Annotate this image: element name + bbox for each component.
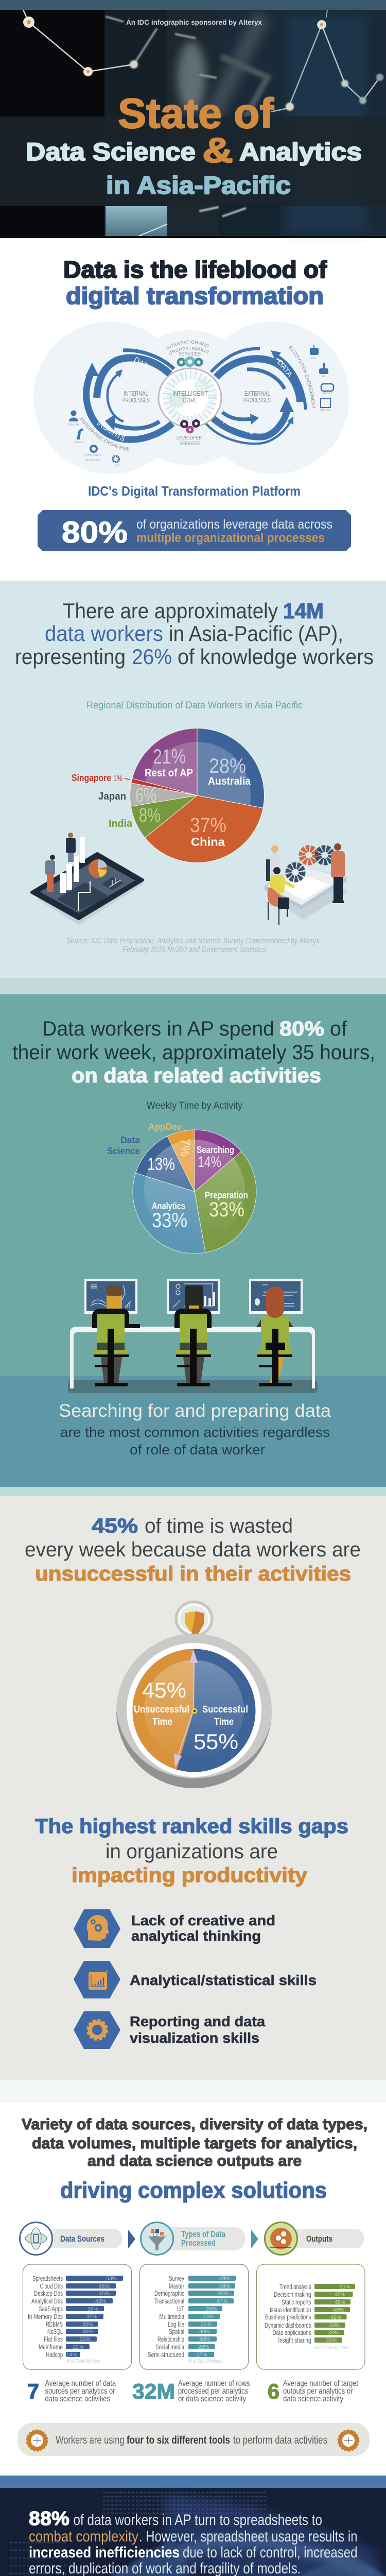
card: data sources bars: 36% <box>87 2306 98 2312</box>
pie chart: weekly time by activity: 33% <box>209 1198 244 1221</box>
pie chart: regional distribution <box>72 728 265 863</box>
heading: driving complex solutions <box>60 2178 327 2203</box>
card: outputs bars: 39% <box>329 2323 340 2329</box>
pie chart: weekly time by activity: Data <box>120 1135 141 1145</box>
card: types of data bars: Log file <box>168 2320 184 2328</box>
panel: data workers <box>15 599 374 954</box>
chart: stopwatch time split: 55% <box>194 1730 238 1754</box>
text: searching and preparing: of role of data worker <box>130 1442 265 1458</box>
callout: 80% of organizations: multiple organizational processes <box>136 531 325 545</box>
source note <box>66 937 321 954</box>
header: outputs: Outputs <box>306 2234 332 2244</box>
card: outputs bars: % of Data Workers <box>314 2345 348 2351</box>
arrow <box>251 2230 258 2248</box>
icons: ecosystem devices: AR/VR <box>322 392 332 395</box>
pie chart: weekly time by activity: Preparation <box>205 1190 248 1200</box>
desk <box>70 1327 315 1388</box>
process labels: INTERNAL <box>124 390 148 397</box>
card: outputs bars: 48% <box>335 2292 345 2298</box>
right loop arrows <box>206 349 306 444</box>
card: types of data bars: 33% <box>203 2314 214 2320</box>
intelligent core: INTELLIGENT <box>172 390 208 397</box>
card: data sources bars: Spreadsheets <box>32 2275 63 2282</box>
icons: ecosystem devices: IoT <box>322 375 327 378</box>
panel: call to action <box>0 2488 386 2576</box>
chart title: Regional Distribution of Data Workers in Asia Pacific <box>86 700 303 711</box>
card: data sources bars: 30% <box>82 2329 93 2335</box>
card: data sources bars: Desktop Dbs <box>34 2290 63 2297</box>
stat: 32M rows: Average number of rows <box>178 2379 250 2388</box>
heading: 14M <box>283 599 324 623</box>
icons: enterprise: Processes <box>85 459 101 462</box>
pie chart: regional distribution: Singapore <box>72 773 111 783</box>
heading: of <box>330 1018 347 1040</box>
text: spreadsheets finding: 88% <box>29 2508 69 2530</box>
pie chart: weekly time by activity: Science <box>107 1146 140 1156</box>
icons: enterprise: API <box>114 464 120 467</box>
heading: data workers <box>45 621 163 646</box>
pie chart: weekly time by activity: Searching <box>197 1145 234 1155</box>
card: data sources bars: RDBMS <box>46 2320 63 2328</box>
hero photo background <box>0 0 386 238</box>
engagement arc labels: DEVELOPER <box>177 435 202 441</box>
text: spreadsheets finding: combat complexity <box>29 2528 138 2545</box>
band labels: DATA <box>132 355 154 372</box>
pie chart: regional distribution: 1% <box>113 774 122 783</box>
stat: 32M rows: processed per analytics <box>178 2387 248 2396</box>
callout: 80% of organizations: of organizations leverage data across <box>136 517 332 532</box>
card: outputs bars <box>256 2264 365 2369</box>
source note: Source: IDC Data Preparation, Analytics and Science Survey Commissioned by Alteryx, <box>66 937 321 945</box>
heading <box>12 1018 375 1087</box>
card: data sources bars: 29% <box>80 2336 91 2343</box>
card: data sources bars: In-Memory Dbs <box>28 2313 63 2320</box>
heading: 80% <box>279 1018 324 1040</box>
heading <box>15 599 374 669</box>
card: outputs bars: Static reports <box>282 2298 311 2306</box>
callout: tools: four to six different tools <box>127 2434 230 2446</box>
card: types of data bars: Survey <box>169 2275 184 2282</box>
person right <box>331 843 345 903</box>
card: types of data bars: 30% <box>199 2336 210 2343</box>
stat: 32M rows: 32M <box>132 2379 175 2403</box>
card: types of data bars: Multimedia <box>160 2313 184 2320</box>
engagement arc labels: INTEGRATION AND <box>166 340 209 350</box>
skill 3: visualization skills <box>130 2030 259 2046</box>
heading <box>25 1515 361 1585</box>
engagement arc labels: SERVICES <box>180 441 200 447</box>
skills heading: impacting productivity <box>72 1864 308 1887</box>
stat: 7 data sources: 7 <box>27 2379 39 2403</box>
stat: 7 data sources: data science activities <box>45 2395 110 2403</box>
pie chart: regional distribution: 28% <box>209 755 246 777</box>
icon: bar chart <box>74 1961 120 1998</box>
card: outputs bars: Issue identification <box>270 2306 311 2314</box>
heading: on data related activities <box>72 1064 321 1087</box>
heading: There are approximately <box>63 599 278 623</box>
stat: 7 data sources: sources per analytics or <box>45 2387 115 2396</box>
illustration: people on tablet <box>32 833 144 925</box>
card: outputs bars: 38% <box>328 2330 339 2336</box>
card: data sources bars <box>23 2264 132 2369</box>
heading <box>63 256 327 309</box>
header: data sources: Data Sources <box>60 2234 104 2244</box>
intelligent core: CORE <box>183 397 198 404</box>
card: outputs bars: Decision making <box>274 2291 311 2298</box>
skill 3: Reporting and data <box>130 2013 265 2029</box>
illustration: data workers at desks <box>68 1279 318 1393</box>
chart: stopwatch time split: 45% <box>142 1678 186 1702</box>
band labels <box>95 355 294 443</box>
dial hand arrow <box>174 1649 198 1768</box>
pie chart: regional distribution: 8% <box>139 805 161 826</box>
process labels: PROCESSES <box>243 397 271 404</box>
card: types of data bars: Transactional <box>154 2297 184 2305</box>
card: types of data bars: Semi-structured <box>148 2351 184 2359</box>
pie chart: weekly time by activity: 33% <box>152 1209 187 1232</box>
heading: 26% <box>132 645 172 669</box>
chart: stopwatch time split: Time <box>152 1717 172 1727</box>
card: types of data bars: 48% <box>218 2291 229 2297</box>
skill 2: Analytical/statistical skills <box>130 1972 317 1988</box>
worker 3 <box>256 1286 293 1386</box>
heading: representing <box>15 645 126 669</box>
card: outputs bars: 41% <box>330 2314 341 2320</box>
card: outputs bars: Data applications <box>273 2329 311 2336</box>
stopwatch crown <box>176 1602 212 1636</box>
panel: wasted time and skills <box>25 1515 361 2049</box>
pie chart: weekly time by activity: 14% <box>198 1154 221 1171</box>
icon: teal gears <box>178 358 202 366</box>
stat: 6 target outputs: outputs per analytics or <box>283 2387 353 2396</box>
card: types of data bars: 31% <box>201 2321 212 2328</box>
card: types of data bars: 28% <box>198 2344 209 2350</box>
icon: gear left <box>27 2430 47 2451</box>
icons: enterprise <box>68 410 120 467</box>
chart: stopwatch time split: Time <box>214 1717 234 1727</box>
card: outputs bars: 35% <box>326 2337 337 2344</box>
header: data sources <box>20 2223 122 2255</box>
text: searching and preparing <box>59 1401 331 1458</box>
skill 1 <box>74 1909 275 1948</box>
engagement arc labels <box>80 340 315 451</box>
background map photo <box>0 2488 386 2576</box>
diagram caption: IDC's Digital Transformation Platform <box>88 483 301 499</box>
pie chart: regional distribution: Japan <box>98 791 126 802</box>
heading: Variety of data sources, diversity of data types, <box>22 2116 367 2133</box>
stat: 7 data sources: Average number of data <box>45 2379 116 2388</box>
card: data sources bars: Analytical Dbs <box>31 2297 63 2305</box>
card: data sources bars: 22% <box>73 2344 83 2350</box>
worker 2 <box>174 1285 212 1386</box>
card: data sources bars: 53% <box>106 2276 117 2282</box>
card: data sources bars: Flat files <box>44 2335 63 2343</box>
pie chart: regional distribution: China <box>191 835 225 849</box>
title: Analytics <box>239 139 362 166</box>
person seated <box>268 867 294 925</box>
card: data sources bars: NoSQL <box>47 2328 63 2335</box>
header: types of data processed <box>141 2223 245 2255</box>
card: types of data bars: IoT <box>177 2305 184 2313</box>
callout: tools: to perform data activities <box>233 2434 327 2446</box>
card: outputs bars: Insight sharing <box>278 2336 311 2344</box>
icon: gear <box>74 2011 120 2049</box>
header: types of data processed: Types of Data <box>181 2229 225 2239</box>
icons: ecosystem devices: Bot <box>311 357 316 360</box>
skills heading: in organizations are <box>106 1840 278 1863</box>
pie chart: weekly time by activity: 13% <box>147 1155 175 1174</box>
card: types of data bars: Demographic <box>154 2290 184 2297</box>
chart lines in hero photo <box>23 10 383 112</box>
skill 1: analytical thinking <box>131 1928 261 1944</box>
worker 1 <box>92 1285 140 1386</box>
dial <box>133 1649 255 1772</box>
text: spreadsheets finding: of data workers in AP turn to spreadsheets to <box>73 2512 322 2529</box>
card: types of data bars: 49% <box>219 2283 231 2290</box>
band labels: DATA <box>276 358 294 379</box>
card: outputs bars: 45% <box>333 2307 344 2313</box>
pie chart: regional distribution: 21% <box>153 745 186 768</box>
intelligent core <box>159 368 221 427</box>
heading: of knowledge workers <box>178 645 374 669</box>
card: types of data bars: 30% <box>199 2329 210 2335</box>
engagement arc labels: SERVICES <box>179 351 201 357</box>
icon: developer gears <box>181 420 199 432</box>
card: types of data bars: Social media <box>155 2343 184 2351</box>
heading <box>22 2116 367 2203</box>
callout: tools <box>17 2423 370 2456</box>
card: data sources bars: 46% <box>99 2291 110 2297</box>
person standing <box>45 855 55 892</box>
card: outputs bars: Business predictions <box>265 2313 311 2321</box>
icon: head with gears <box>74 1909 120 1948</box>
process labels: EXTERNAL <box>244 390 270 397</box>
skill 3 <box>74 2011 265 2049</box>
skills heading: The highest ranked skills gaps <box>35 1815 348 1838</box>
card: types of data bars: 36% <box>206 2306 217 2312</box>
chart: stopwatch time split <box>116 1602 272 1788</box>
band labels: INSIGHTS <box>95 419 127 443</box>
text: spreadsheets finding: increased inefficiencies <box>29 2544 180 2561</box>
skills heading <box>35 1815 348 1887</box>
card: outputs bars: Trend analysis <box>279 2283 311 2291</box>
title: & <box>202 131 233 170</box>
engagement arc labels: ENTERPRISE ENGAGEMENTS <box>80 417 130 451</box>
source note: February 2019 N=200 and Government Statistics <box>122 945 266 954</box>
heading: 45% <box>92 1515 138 1537</box>
card: types of data bars <box>140 2264 248 2369</box>
stat: 32M rows <box>132 2379 250 2403</box>
callout: 80% of organizations: 80% <box>62 516 128 549</box>
card: outputs bars: Dynamic dashboards <box>265 2321 311 2329</box>
heading: of time is wasted <box>145 1515 293 1537</box>
icons: ecosystem devices <box>310 345 334 412</box>
heading: Data workers in AP spend <box>42 1018 274 1040</box>
heading: unsuccessful in their activities <box>35 1563 351 1585</box>
pie chart: weekly time by activity <box>107 1123 256 1254</box>
text: searching and preparing: are the most common activities regardless <box>60 1425 330 1440</box>
engagement arc labels: ORCHESTRATION <box>169 347 209 355</box>
skill 2 <box>74 1961 317 1998</box>
title <box>26 90 362 199</box>
card: types of data bars: 49% <box>219 2276 231 2282</box>
chart title: Weekly Time by Activity <box>147 1100 242 1111</box>
arrow <box>128 2230 135 2248</box>
icon: gear right <box>338 2430 359 2451</box>
card: data sources bars: Mainframe <box>39 2343 63 2351</box>
title: in Asia-Pacific <box>106 172 291 199</box>
card: data sources bars: 14% <box>66 2352 77 2358</box>
stopwatch case <box>116 1634 272 1788</box>
card: outputs bars: 46% <box>335 2299 345 2306</box>
card: types of data bars: Relationship <box>157 2335 184 2343</box>
card: data sources bars: Cloud Dbs <box>40 2282 63 2290</box>
diagram: IDC platform infinity loop <box>33 321 349 474</box>
heading: in Asia-Pacific (AP), <box>169 621 343 646</box>
card: types of data bars: % of Data Workers <box>188 2359 221 2364</box>
callout: 80% of organizations <box>38 510 351 551</box>
stat: 32M rows: or data science activity <box>178 2395 246 2403</box>
band labels: ACTIONS <box>222 417 255 436</box>
icons: ecosystem devices: Mobile <box>320 408 330 412</box>
card: data sources bars: 46% <box>99 2283 110 2290</box>
heading: data volumes, multiple targets for analytics, <box>32 2135 357 2152</box>
person left <box>266 845 279 881</box>
card: data sources bars: 30% <box>82 2321 93 2328</box>
sponsor line: An IDC infographic sponsored by Alteryx <box>126 18 262 26</box>
gears <box>289 849 331 879</box>
pie chart: regional distribution: 37% <box>190 814 226 837</box>
pie chart: weekly time by activity: Analytics <box>152 1201 185 1211</box>
panel: weekly time <box>12 1018 375 1458</box>
heading: their work week, approximately 35 hours, <box>12 1041 375 1064</box>
pie chart: regional distribution: India <box>109 818 133 829</box>
chart: stopwatch time split: Unsuccessful <box>134 1704 189 1715</box>
stat: 6 target outputs: 6 <box>268 2379 279 2403</box>
text: searching and preparing: Searching for and preparing data <box>59 1401 331 1421</box>
stat: 6 target outputs: data science activity <box>283 2395 343 2403</box>
pie chart: weekly time by activity: AppDev <box>148 1122 182 1132</box>
stat: 6 target outputs <box>268 2379 358 2403</box>
process labels: PROCESSES <box>122 397 150 404</box>
card: types of data bars: 27% <box>197 2352 207 2358</box>
heading: Data is the lifeblood of <box>63 256 327 283</box>
title: Data Science <box>26 139 196 166</box>
header: outputs <box>265 2223 364 2255</box>
panel: hero <box>0 0 386 238</box>
card: types of data bars: Master <box>169 2282 184 2290</box>
panel: complex solutions <box>17 2116 370 2456</box>
pie chart: regional distribution: Australia <box>208 775 251 787</box>
card: outputs bars: 51% <box>340 2284 350 2290</box>
left loop arrows <box>85 350 174 439</box>
process labels <box>122 390 271 404</box>
pie chart: weekly time by activity: 7% <box>178 1139 192 1157</box>
card: data sources bars: 35% <box>86 2314 97 2320</box>
illustration: team with gears <box>265 843 348 925</box>
title: State of <box>118 90 274 137</box>
card: data sources bars: % of Data Workers <box>66 2359 100 2364</box>
stat: 6 target outputs: Average number of target <box>283 2379 358 2388</box>
monitors <box>84 1279 303 1314</box>
card: types of data bars: Spatial <box>169 2328 184 2335</box>
card: data sources bars: SaaS Apps <box>39 2305 63 2313</box>
pie chart: regional distribution: Rest of AP <box>145 767 193 779</box>
card: data sources bars: Hadoop <box>46 2351 63 2359</box>
icons: enterprise: Assets <box>74 440 84 444</box>
skill 1: Lack of creative and <box>131 1912 275 1928</box>
panel: digital transformation <box>33 256 351 551</box>
icons: enterprise: Connected <box>84 453 101 457</box>
stat: 7 data sources <box>27 2379 116 2403</box>
icons: enterprise: People <box>68 423 79 427</box>
pie chart: regional distribution: 6% <box>135 784 156 807</box>
person on bars <box>66 833 76 862</box>
text: spreadsheets finding <box>29 2508 357 2576</box>
engagement arc labels: ECOSYSTEM ENGAGEMENTS <box>288 346 315 409</box>
heading: and data science outputs are <box>87 2153 302 2170</box>
card: types of data bars: 47% <box>217 2298 227 2304</box>
heading: every week because data workers are <box>25 1538 361 1561</box>
chart: stopwatch time split: Successful <box>202 1704 248 1715</box>
header: types of data processed: Processed <box>181 2238 216 2248</box>
card: data sources bars: 43% <box>95 2298 106 2304</box>
callout: tools: Workers are using <box>56 2434 125 2446</box>
heading: digital transformation <box>66 282 324 309</box>
